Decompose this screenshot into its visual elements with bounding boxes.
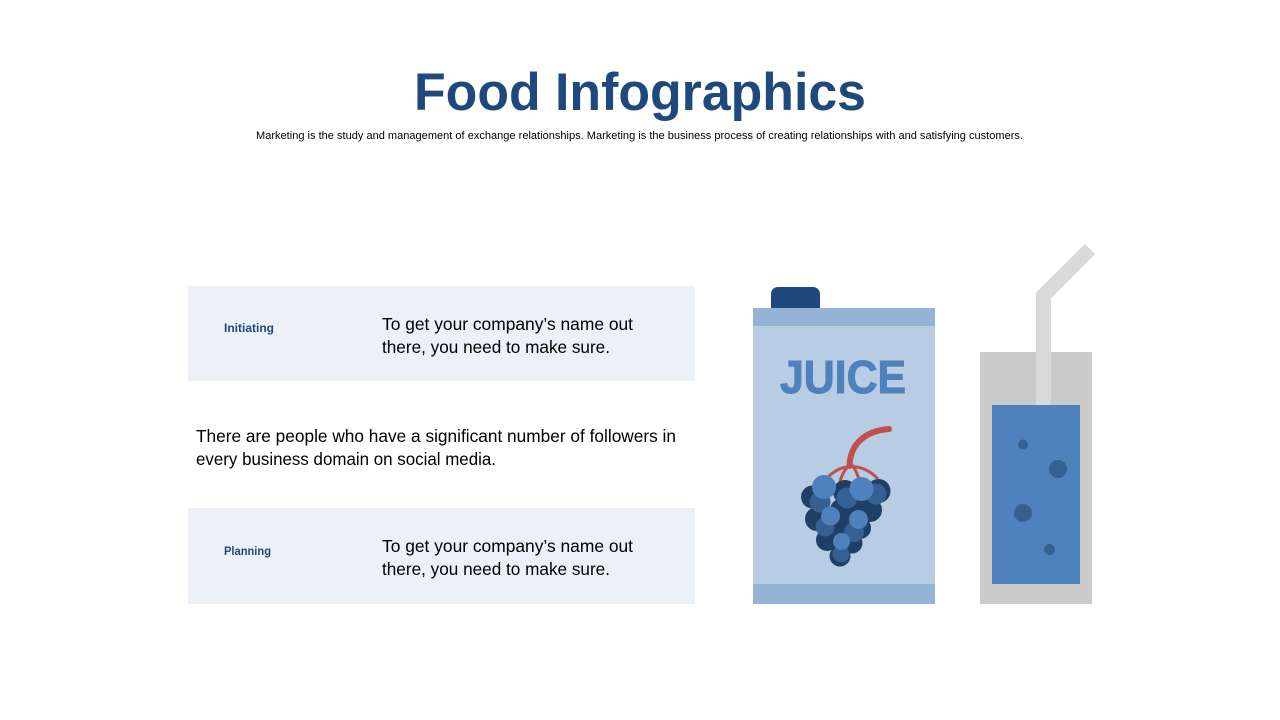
- icon: grapes: [801, 429, 890, 566]
- text block: initiating description: To get your company’s name out: [382, 314, 633, 334]
- subtitle: Marketing is the study and management of exchange relationships. Marketing is the business process of creating relationships with and satisfying customers.: [256, 130, 1023, 142]
- straw: [1036, 244, 1095, 405]
- icon: juice glass: [980, 244, 1095, 604]
- label: initiating: Initiating: [224, 321, 274, 335]
- panel: planning: [188, 508, 695, 604]
- label: planning: Planning: [224, 544, 271, 558]
- juice liquid: [992, 405, 1080, 584]
- carton label: JUICE: [780, 351, 906, 403]
- title: Food Infographics: [414, 63, 866, 122]
- bubbles: [1014, 440, 1067, 555]
- text block: initiating description: [382, 314, 633, 357]
- text block: initiating description: there, you need to make sure.: [382, 337, 610, 357]
- panel: initiating: [188, 286, 695, 381]
- text block: planning description: there, you need to make sure.: [382, 559, 610, 579]
- text block: planning description: To get your company’s name out: [382, 536, 633, 556]
- icon: juice carton: [753, 287, 935, 604]
- text block: middle paragraph: There are people who have a significant number of followers in: [196, 426, 676, 446]
- text block: planning description: [382, 536, 633, 579]
- text block: middle paragraph: [196, 426, 676, 469]
- text block: middle paragraph: every business domain on social media.: [196, 449, 496, 469]
